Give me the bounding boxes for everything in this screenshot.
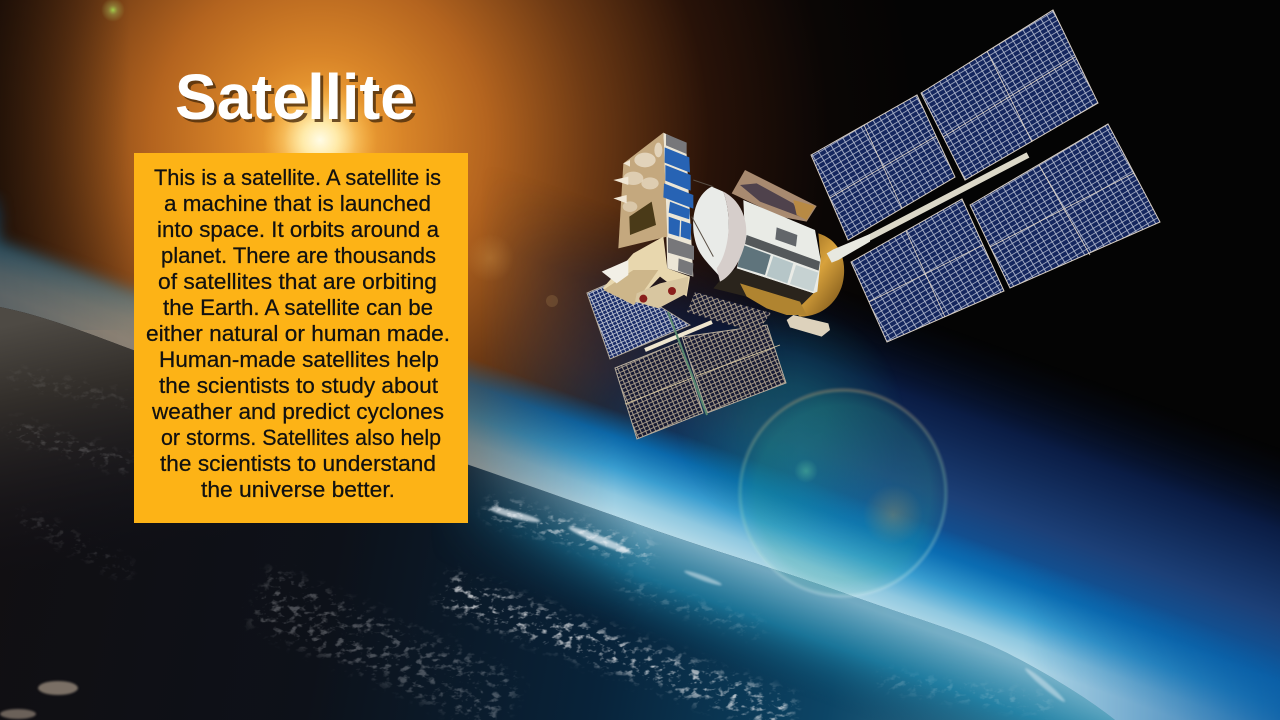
boom fitting xyxy=(827,234,870,263)
red connectors xyxy=(639,295,647,303)
text block: description: planet. There are thousands xyxy=(161,243,436,268)
white antenna xyxy=(602,260,628,283)
lens flares xyxy=(101,0,946,596)
dome rings xyxy=(717,192,746,282)
text block: description: weather and predict cyclones xyxy=(151,399,444,424)
title: Satellite xyxy=(178,64,418,136)
text block: description: the Earth. A satellite can be xyxy=(163,295,433,320)
sun glow xyxy=(262,82,378,198)
panel: description xyxy=(134,153,468,523)
text block: description: the scientists to study about xyxy=(159,373,439,398)
title: Satellite xyxy=(175,61,415,133)
satellite xyxy=(587,10,1160,439)
solar panel arm xyxy=(830,155,1028,258)
text block: description: of satellites that are orbiting xyxy=(158,269,437,294)
earth surface xyxy=(0,307,1115,720)
solar panels: upper right xyxy=(811,10,1160,342)
foil antenna xyxy=(732,170,817,222)
text block: description: Human-made satellites help xyxy=(159,347,439,372)
cloud texture xyxy=(9,371,1050,720)
gold end section xyxy=(787,233,844,317)
crystal texture xyxy=(613,143,662,212)
solar panels: lower left xyxy=(587,280,786,439)
bright clouds xyxy=(0,505,1067,719)
text block: description: into space. It orbits around a xyxy=(157,217,439,242)
text block: description: This is a satellite. A satellite is xyxy=(154,165,441,190)
blue modules xyxy=(663,147,693,240)
text block: description: either natural or human made. xyxy=(146,321,450,346)
spacecraft body (zoom coordinates) xyxy=(602,133,870,337)
atmosphere glow xyxy=(0,195,1280,720)
text block: description: or storms. Satellites also help xyxy=(161,425,441,450)
grey modules xyxy=(666,134,694,276)
text block: description: the universe better. xyxy=(201,477,395,502)
text block: description: the scientists to understand xyxy=(160,451,436,476)
thruster xyxy=(787,315,830,337)
main cylinder xyxy=(737,200,821,293)
bus box xyxy=(663,133,693,277)
dome xyxy=(693,187,729,275)
small dark panel xyxy=(687,292,771,333)
lower tray xyxy=(603,237,690,305)
lower dark underside xyxy=(713,268,813,307)
text block: description xyxy=(146,165,450,502)
text block: description: a machine that is launched xyxy=(164,191,431,216)
